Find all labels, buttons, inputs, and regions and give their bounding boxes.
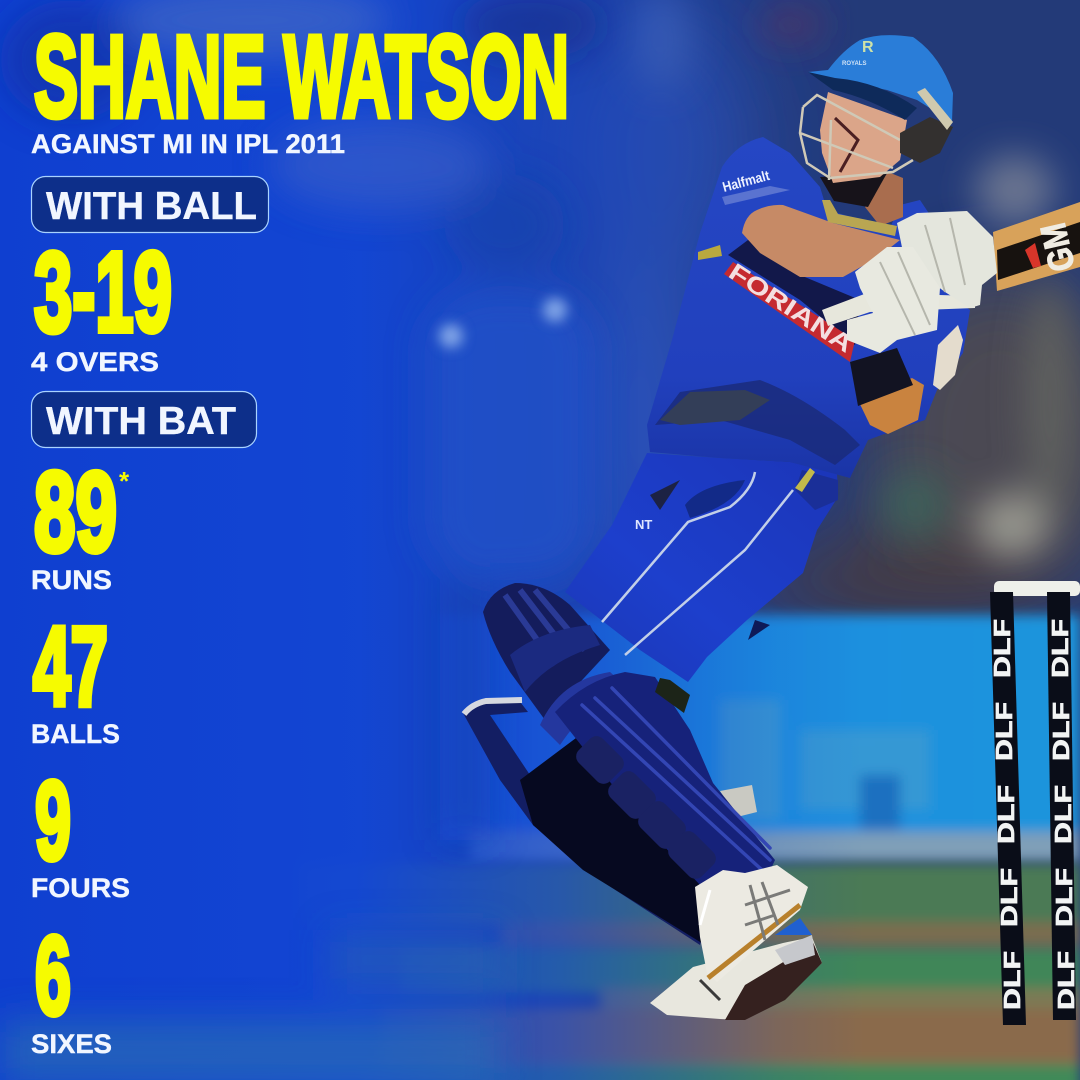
stumps with DLF branding: DLF — [1050, 785, 1076, 844]
section pill: with ball — [32, 176, 268, 232]
bat handle — [822, 293, 975, 326]
back shoe — [650, 918, 822, 1020]
background: advertising board — [440, 615, 1080, 862]
stat: runs: 89 — [34, 449, 117, 575]
upper arm — [742, 205, 900, 277]
helmet: ROYALS — [842, 61, 866, 67]
dark inner pad — [520, 720, 770, 945]
helmet — [808, 35, 953, 130]
knee rolls — [510, 625, 600, 692]
bat — [993, 202, 1080, 291]
stumps with DLF branding: DLF — [1053, 951, 1079, 1010]
gloves — [847, 211, 997, 353]
stat: sixes — [31, 914, 112, 1059]
yellow sleeve trim — [698, 245, 722, 260]
shin panels — [572, 732, 720, 883]
stumps with DLF branding: DLF — [1048, 702, 1074, 761]
sleeve badge — [933, 325, 963, 390]
head — [800, 92, 953, 183]
stat: bowling figures: 4 OVERS — [31, 347, 159, 377]
stumps with DLF branding — [989, 581, 1080, 1025]
section pill: with bat — [32, 392, 256, 448]
dark underarm — [728, 240, 860, 345]
stumps with DLF branding: DLF — [999, 951, 1025, 1010]
stumps with DLF branding: DLF — [1047, 619, 1073, 678]
thigh section — [483, 583, 610, 720]
stat: sixes: 6 — [35, 914, 71, 1038]
batsman — [463, 35, 1080, 1020]
subtitle: AGAINST MI IN IPL 2011 — [31, 129, 345, 159]
back leg pad — [463, 698, 757, 945]
stumps with DLF branding: DLF — [991, 702, 1017, 761]
stat: sixes: SIXES — [31, 1029, 112, 1059]
front leg pad — [483, 583, 775, 945]
stumps with DLF branding: DLF — [989, 619, 1015, 678]
neck and collar — [820, 172, 903, 236]
section pill: with bat: WITH BAT — [46, 400, 236, 443]
stumps with DLF branding: DLF — [996, 868, 1022, 927]
title: SHANE WATSON — [34, 12, 569, 142]
stat: fours — [31, 759, 130, 903]
stat: bowling figures — [31, 229, 172, 377]
pad side flap — [720, 785, 757, 817]
background: grass and pitch — [0, 864, 1080, 1080]
front shoe — [695, 865, 808, 982]
stat: fours: 9 — [35, 759, 71, 883]
blurred colour variation on the left — [0, 0, 600, 1080]
section pill: with ball: WITH BALL — [46, 185, 257, 228]
strap — [655, 678, 690, 713]
stat: balls: BALLS — [31, 719, 120, 749]
stat: runs: RUNS — [31, 565, 112, 595]
trousers: NT — [635, 517, 652, 532]
sponsor band — [724, 262, 855, 362]
stat: runs — [31, 449, 130, 595]
trousers — [565, 453, 838, 682]
helmet: R — [862, 39, 874, 56]
forearm and wristband — [850, 348, 924, 434]
jersey: FORIANA — [724, 258, 858, 358]
stat: bowling figures: 3-19 — [34, 229, 172, 355]
shin section — [555, 672, 775, 885]
stumps with DLF branding: DLF — [993, 785, 1019, 844]
stumps with DLF branding: DLF — [1051, 868, 1077, 927]
stat: runs: * — [119, 466, 130, 496]
dark shirt fold — [655, 380, 860, 465]
jersey — [647, 137, 970, 478]
stat: balls: 47 — [33, 604, 108, 729]
sleeve sponsor: Halfmalt — [721, 167, 771, 195]
stat: fours: FOURS — [31, 873, 130, 903]
stat: balls — [31, 604, 120, 749]
